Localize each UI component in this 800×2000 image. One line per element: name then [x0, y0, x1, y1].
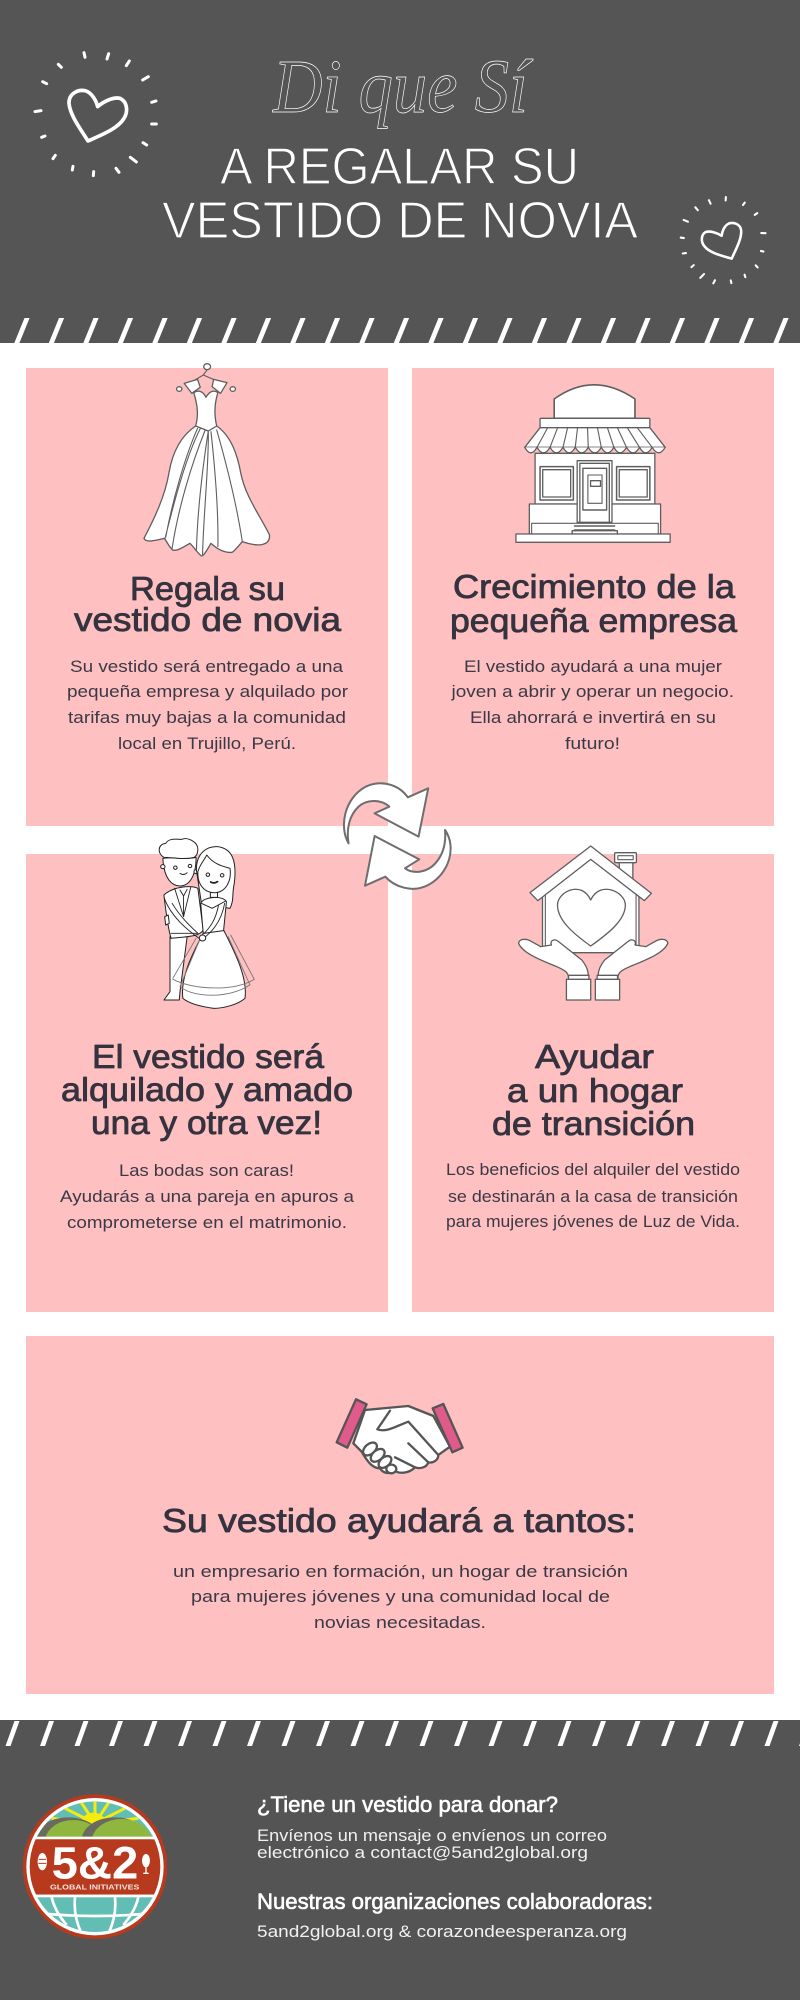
partners heading: Nuestras organizaciones colaboradoras:: [257, 1889, 653, 1914]
title line 1: A REGALAR SU: [220, 138, 579, 196]
panel: crecimiento de la pequeña empresa: [412, 368, 774, 826]
contact text: [257, 1826, 607, 1862]
header banner: [0, 0, 800, 343]
logo: 5&2 Global Initiatives: GLOBAL INITIATIVES: [50, 1883, 139, 1892]
title line 2: VESTIDO DE NOVIA: [162, 192, 638, 250]
heading: pequeña empresa: [450, 602, 738, 639]
heading: El vestido será: [92, 1038, 325, 1075]
heading: [74, 570, 342, 638]
body text: joven a abrir y operar un negocio.: [450, 682, 734, 701]
heading: de transición: [492, 1105, 695, 1142]
icon: heart with rays, left: [35, 53, 156, 176]
body text: Los beneficios del alquiler del vestido: [446, 1160, 740, 1179]
logo: 5&2 Global Initiatives: [23, 1794, 167, 1939]
heading: [492, 1038, 695, 1142]
icon: house with heart held by hands: [519, 846, 668, 1000]
donate heading: ¿Tiene un vestido para donar?: [257, 1792, 558, 1817]
body text: El vestido ayudará a una mujer: [464, 657, 722, 676]
icon: handshake: [337, 1399, 463, 1473]
icon: heart with rays, right: [676, 192, 772, 289]
heading: Regala su: [130, 570, 285, 607]
body text: para mujeres jóvenes y una comunidad local de: [191, 1587, 610, 1606]
panel: ayudar a un hogar de transición: [412, 846, 774, 1312]
contact text: electrónico a contact@5and2global.org: [257, 1843, 588, 1862]
body text: [67, 657, 348, 753]
icon: storefront: [516, 385, 670, 542]
heading: Ayudar: [535, 1038, 654, 1075]
heading: Crecimiento de la: [453, 568, 736, 605]
body text: Las bodas son caras!: [119, 1161, 294, 1180]
body text: comprometerse en el matrimonio.: [67, 1213, 347, 1232]
heading: [61, 1038, 353, 1141]
body text: local en Trujillo, Perú.: [118, 734, 296, 753]
contact text: Envíenos un mensaje o envíenos un correo: [257, 1826, 607, 1845]
heading: a un hogar: [507, 1072, 683, 1109]
heading: [450, 568, 738, 639]
body text: [446, 1160, 740, 1231]
heading: Su vestido ayudará a tantos:: [162, 1502, 636, 1539]
panel: su vestido ayudará a tantos: [26, 1336, 774, 1694]
body text: novias necesitadas.: [314, 1613, 486, 1632]
body text: pequeña empresa y alquilado por: [67, 682, 348, 701]
logo: 5&2 Global Initiatives: 5&2: [52, 1837, 138, 1888]
panel: regala su vestido: [26, 364, 388, 826]
body text: [60, 1161, 355, 1232]
body text: [450, 657, 734, 753]
icon: wedding dress: [144, 364, 270, 556]
footer banner: [0, 1720, 800, 2000]
icon: bride and groom: [159, 839, 254, 1008]
panel: el vestido será alquilado: [26, 839, 388, 1312]
body text: Ella ahorrará e invertirá en su: [470, 708, 716, 727]
icon: cycle arrows: [344, 783, 451, 889]
title script line: Di que Sí: [272, 45, 533, 129]
body text: futuro!: [565, 734, 620, 753]
heading: una y otra vez!: [91, 1104, 322, 1141]
body text: un empresario en formación, un hogar de transición: [173, 1562, 628, 1581]
body text: Su vestido será entregado a una: [70, 657, 344, 676]
heading: alquilado y amado: [61, 1071, 353, 1108]
partner links: 5and2global.org & corazondeesperanza.org: [257, 1922, 627, 1941]
body text: para mujeres jóvenes de Luz de Vida.: [446, 1212, 740, 1231]
heading: vestido de novia: [74, 601, 342, 638]
body text: Ayudarás a una pareja en apuros a: [60, 1187, 355, 1206]
body text: [173, 1562, 628, 1632]
body text: se destinarán a la casa de transición: [448, 1187, 738, 1206]
body text: tarifas muy bajas a la comunidad: [68, 708, 346, 727]
